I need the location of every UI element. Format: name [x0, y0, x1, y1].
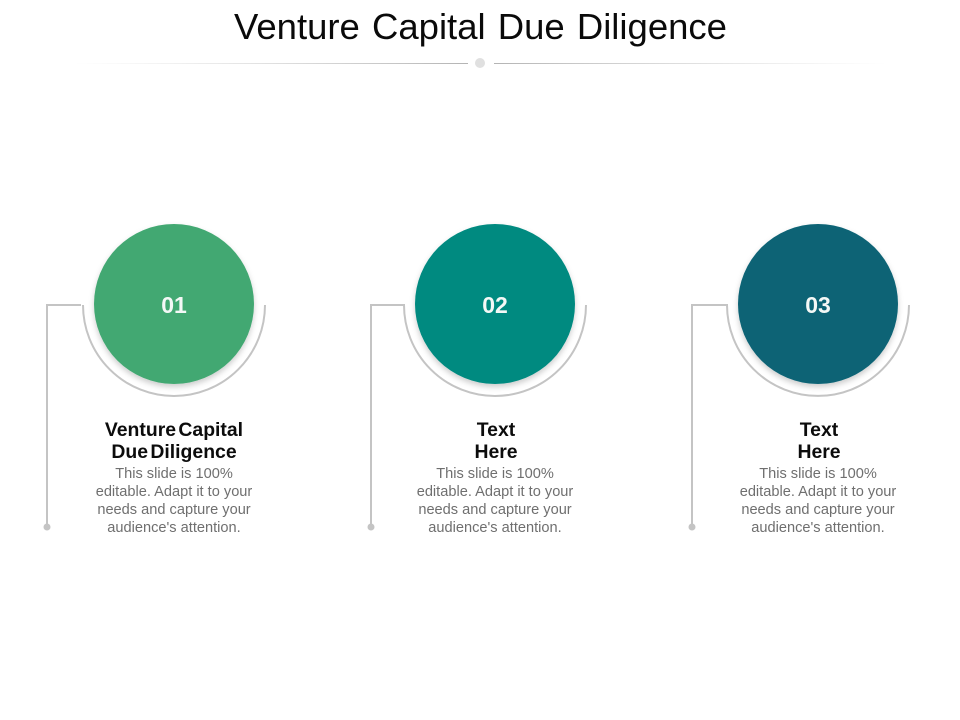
number 03: 03: [805, 292, 831, 318]
body 1: This slide is 100%: [115, 466, 233, 482]
body 1: editable. Adapt it to your: [96, 484, 252, 500]
title divider with dot: [134, 58, 828, 68]
body 3: needs and capture your: [741, 502, 895, 518]
heading 1: Venture Capital: [105, 419, 243, 441]
body 1: [96, 466, 252, 536]
heading 2: Here: [474, 441, 518, 463]
number 02: 02: [482, 292, 508, 318]
body 2: editable. Adapt it to your: [417, 484, 573, 500]
connector 1: [44, 305, 265, 530]
heading 3: Here: [797, 441, 841, 463]
body 2: This slide is 100%: [436, 466, 554, 482]
number 01: 01: [161, 292, 187, 318]
heading 3: [797, 419, 841, 463]
body 2: [417, 466, 573, 536]
title: Venture Capital Due Diligence: [234, 6, 727, 47]
heading 2: Text: [477, 419, 515, 441]
circle 3: [738, 224, 898, 384]
body 2: audience's attention.: [428, 520, 562, 536]
connector 3: [688, 305, 909, 530]
body 3: editable. Adapt it to your: [740, 484, 896, 500]
heading 1: Due Diligence: [111, 441, 237, 463]
body 2: needs and capture your: [418, 502, 572, 518]
circle 1: [94, 224, 254, 384]
connector 2: [368, 305, 586, 530]
circle 2: [415, 224, 575, 384]
heading 1: [105, 419, 243, 463]
body 1: audience's attention.: [107, 520, 241, 536]
heading 2: [474, 419, 518, 463]
body 3: This slide is 100%: [759, 466, 877, 482]
body 3: audience's attention.: [751, 520, 885, 536]
body 3: [740, 466, 896, 536]
body 1: needs and capture your: [97, 502, 251, 518]
heading 3: Text: [800, 419, 838, 441]
